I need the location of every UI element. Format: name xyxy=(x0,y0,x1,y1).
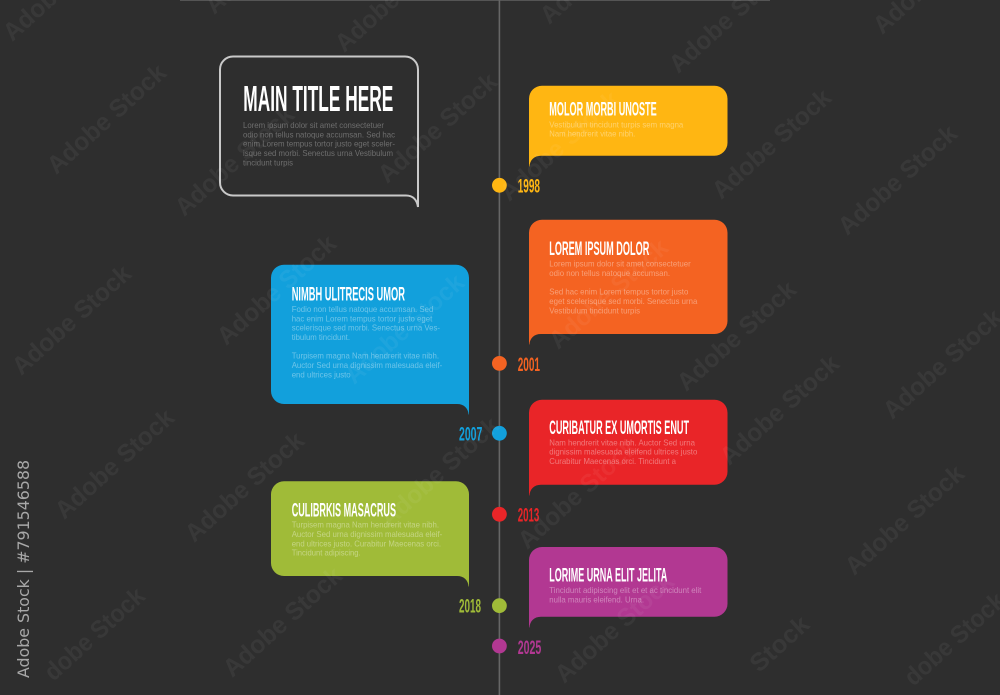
watermark pattern: Adobe Stock xyxy=(340,268,470,390)
watermark pattern: Adobe Stock xyxy=(7,259,137,381)
panel: 2007 blue card: NIMBH ULITRECIS UMOR xyxy=(292,284,405,306)
text block: red card: Curabitur Maecenas orci. Tincidunt a xyxy=(549,456,676,466)
marker: 2001 xyxy=(492,354,540,376)
text block: main intro: odio non tellus natoque accumsan. Sed hac xyxy=(243,129,395,139)
text block: blue card: hac enim Lorem tempus tortor justo eget xyxy=(292,313,433,323)
text block: main intro xyxy=(243,120,395,167)
text block: orange card: Lorem ipsum dolor sit amet consectetuer xyxy=(549,259,691,269)
panel: 2018 green card: CULIBRKIS MASACRUS xyxy=(292,499,396,521)
marker: 1998 xyxy=(492,175,540,197)
text block: green card: end ultrices justo. Curabitur Maecenas orci. xyxy=(292,538,441,548)
marker: 2018: 2018 xyxy=(459,596,481,618)
watermark pattern: Adobe Stock xyxy=(170,100,300,222)
text: 2013 xyxy=(518,504,539,526)
watermark pattern: Adobe Stock xyxy=(715,349,845,471)
text block: red card xyxy=(549,437,698,466)
panel: 2025 purple card: LORIME URNA ELIT JELITA xyxy=(549,564,667,586)
text block: yellow card xyxy=(549,119,684,139)
text block: green card: Auctor Sed urna dignissim malesuada eleif- xyxy=(292,529,442,539)
text block: main intro: tincidunt turpis xyxy=(243,157,293,167)
watermark pattern: Adobe Stock xyxy=(218,561,348,683)
text block: green card xyxy=(292,520,442,558)
watermark pattern: Adobe Stock xyxy=(212,229,342,351)
text block: purple card: nulla mauris eleifend. Urna. xyxy=(549,594,644,604)
stock id side label: Adobe Stock | #791546588 xyxy=(14,460,33,678)
text block: orange card xyxy=(549,259,698,315)
marker: 2025 xyxy=(492,637,541,659)
watermark pattern: Adobe Stock xyxy=(707,83,837,205)
watermark pattern: Adobe Stock xyxy=(373,67,503,189)
watermark pattern: Adobe Stock xyxy=(550,567,680,689)
text block: purple card: Tincidunt adipiscing elit et et ac tincidunt elit xyxy=(549,585,702,595)
watermark pattern: Adobe Stock xyxy=(513,433,643,555)
text block: green card: Tincidunt adipiscing. xyxy=(292,548,361,558)
timeline axis xyxy=(499,0,500,695)
text block: purple card xyxy=(549,585,702,604)
panel: 2001 orange card xyxy=(529,220,728,344)
panel: 2013 red card: CURIBATUR EX UMORTIS ENUT xyxy=(549,417,689,439)
watermark pattern: Adobe Stock xyxy=(833,119,963,241)
panel: 2007 blue card xyxy=(271,265,469,414)
text block: blue card xyxy=(292,304,442,379)
text block: blue card: end ultrices justo xyxy=(292,369,351,379)
watermark pattern: Adobe Stock xyxy=(42,58,172,180)
marker: 2001: 2001 xyxy=(518,354,540,376)
text block: orange card: eget scelerisque sed morbi. Senectus urna xyxy=(549,296,698,306)
watermark pattern: Adobe Stock xyxy=(544,233,674,355)
text block: orange card: Sed hac enim Lorem tempus tortor justo xyxy=(549,287,689,297)
text block: red card: dignissim malesuada eleifend ultrices justo xyxy=(549,447,698,457)
text block: blue card: Auctor Sed urna dignissim malesuada eleif- xyxy=(292,360,442,370)
text block: main intro: isque sed morbi. Senectus urna Vestibulum xyxy=(243,148,393,158)
text block: red card: Nam hendrerit vitae nibh. Auctor Sed urna xyxy=(549,437,695,447)
panel: 1998 yellow card xyxy=(529,86,728,166)
watermark pattern: Adobe Stock xyxy=(50,403,180,525)
text block: blue card: tibulum tincidunt. xyxy=(292,332,350,342)
watermark pattern: Adobe Stock xyxy=(672,275,802,397)
text block: green card: Turpisem magna Nam hendrerit vitae nibh. xyxy=(292,520,439,530)
marker: 2007: 2007 xyxy=(459,424,482,446)
panel: 2018 green card xyxy=(271,481,469,586)
watermark pattern: Adobe Stock xyxy=(375,411,505,533)
text block: yellow card: Vestibulum tincidunt turpis sem magna xyxy=(549,119,684,129)
watermark pattern: Adobe Stock xyxy=(180,426,310,548)
text block: blue card: Fodio non tellus natoque accumsan. Sed xyxy=(292,304,434,314)
panel: 2013 red card xyxy=(529,400,728,496)
watermark pattern: Adobe Stock xyxy=(840,459,970,581)
panel: 2001 orange card: LOREM IPSUM DOLOR xyxy=(549,238,649,260)
text block: orange card: odio non tellus natoque accumsan. xyxy=(549,268,670,278)
marker: 2025: 2025 xyxy=(518,637,541,659)
text block: blue card: scelerisque sed morbi. Senectus urna Ves- xyxy=(292,323,440,333)
text block: main intro: Lorem ipsum dolor sit amet consectetuer xyxy=(243,120,384,130)
text block: blue card: Turpisem magna Nam hendrerit vitae nibh. xyxy=(292,351,439,361)
marker: 1998: 1998 xyxy=(518,175,540,197)
text block: main intro: enim Lorem tempus tortor justo eget sceler- xyxy=(243,139,395,149)
text block: orange card: Vestibulum tincidunt turpis xyxy=(549,305,640,315)
panel: main title xyxy=(220,56,418,207)
watermark pattern: dobe Stock xyxy=(39,582,151,686)
panel: 1998 yellow card: MOLOR MORBI UNOSTE xyxy=(549,99,657,121)
panel: 2025 purple card xyxy=(529,547,728,628)
watermark pattern: Stock xyxy=(744,610,815,678)
marker: 2013 xyxy=(492,504,539,526)
text block: yellow card: Nam hendrerit vitae nibh. xyxy=(549,129,635,139)
watermark pattern: Adobe Stock xyxy=(495,85,625,207)
panel: main title: MAIN TITLE HERE xyxy=(243,78,393,119)
